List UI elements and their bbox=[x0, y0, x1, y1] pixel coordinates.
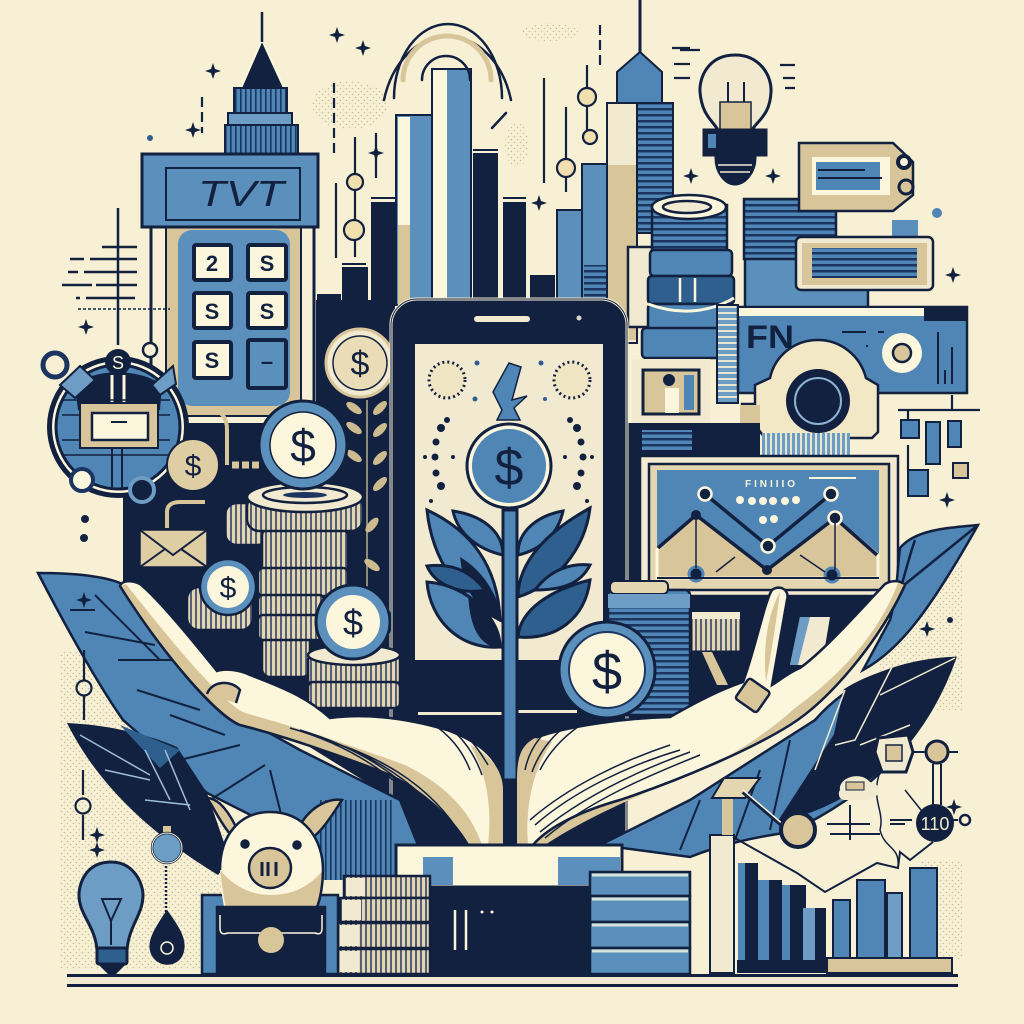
disks left bbox=[338, 876, 430, 974]
text: $ bbox=[343, 602, 363, 643]
stripes under photo bbox=[642, 430, 692, 450]
calculator: S bbox=[260, 299, 274, 324]
right top leaf bbox=[863, 525, 978, 670]
right barrel bbox=[608, 581, 830, 715]
dark lower-left leaf bbox=[67, 723, 230, 875]
bulb bottom-left bbox=[79, 862, 143, 973]
bottom right bar chart: 110 bbox=[921, 814, 949, 834]
envelope bbox=[140, 530, 207, 567]
right hand bbox=[517, 581, 905, 845]
disks right bbox=[590, 872, 690, 974]
concentric arcs bbox=[384, 24, 511, 128]
skyline bbox=[316, 0, 673, 423]
plant bbox=[427, 508, 590, 780]
phone: $ bbox=[495, 439, 524, 497]
rising arrow bbox=[493, 363, 527, 420]
right stack of coins top bbox=[628, 195, 734, 358]
tan pipe bbox=[167, 410, 260, 528]
coins bbox=[259, 401, 347, 489]
calculator: S bbox=[205, 348, 219, 373]
coin right bbox=[559, 622, 655, 718]
left big leaf bbox=[38, 573, 420, 880]
tan coin top: $ bbox=[351, 345, 370, 383]
tan coin top bbox=[326, 329, 394, 397]
coin right: $ bbox=[592, 642, 622, 702]
blue info blocks bbox=[744, 199, 918, 308]
left small tan coin: $ bbox=[185, 450, 202, 483]
text: $ bbox=[220, 572, 237, 605]
chart board: FINIIIO bbox=[745, 479, 795, 490]
right big leaf bbox=[600, 658, 955, 857]
camera dome bbox=[740, 340, 878, 455]
right navy backing bbox=[600, 423, 898, 735]
FN panel: FN bbox=[746, 319, 794, 355]
coin on stem bbox=[467, 424, 551, 508]
calculator: TVT bbox=[198, 173, 288, 214]
sprig bbox=[344, 399, 389, 590]
left hand bbox=[120, 581, 503, 845]
pendant bbox=[151, 826, 183, 964]
dark backdrop bbox=[123, 300, 395, 800]
small ruled lines left bbox=[62, 247, 170, 309]
price tag bbox=[799, 143, 913, 211]
calculator: – bbox=[261, 349, 273, 374]
ground line bbox=[67, 974, 958, 987]
left machine badge: S bbox=[112, 353, 124, 373]
dots arc bbox=[423, 417, 594, 503]
coins: $ bbox=[290, 420, 316, 472]
calculator bbox=[142, 154, 318, 416]
left machine badge bbox=[43, 208, 189, 502]
calculator: 2 bbox=[206, 251, 218, 276]
calculator: S bbox=[260, 251, 274, 276]
circuit decorations bbox=[76, 25, 980, 840]
phone bbox=[391, 299, 627, 854]
coin stack bbox=[187, 482, 400, 708]
sparkle marks bbox=[76, 27, 962, 858]
FN panel bbox=[717, 305, 967, 403]
bulb top-right bbox=[700, 55, 771, 184]
center base bbox=[396, 845, 622, 974]
piggy bank bbox=[202, 798, 342, 974]
card bbox=[796, 237, 933, 290]
bottom right bar chart bbox=[710, 735, 970, 973]
dotted suns bbox=[429, 360, 590, 402]
tower left bbox=[225, 12, 298, 154]
calculator: S bbox=[205, 299, 219, 324]
photo card bbox=[632, 359, 710, 423]
chart board bbox=[640, 456, 898, 596]
small blocks right bbox=[901, 420, 968, 496]
left small tan coin bbox=[167, 439, 219, 491]
